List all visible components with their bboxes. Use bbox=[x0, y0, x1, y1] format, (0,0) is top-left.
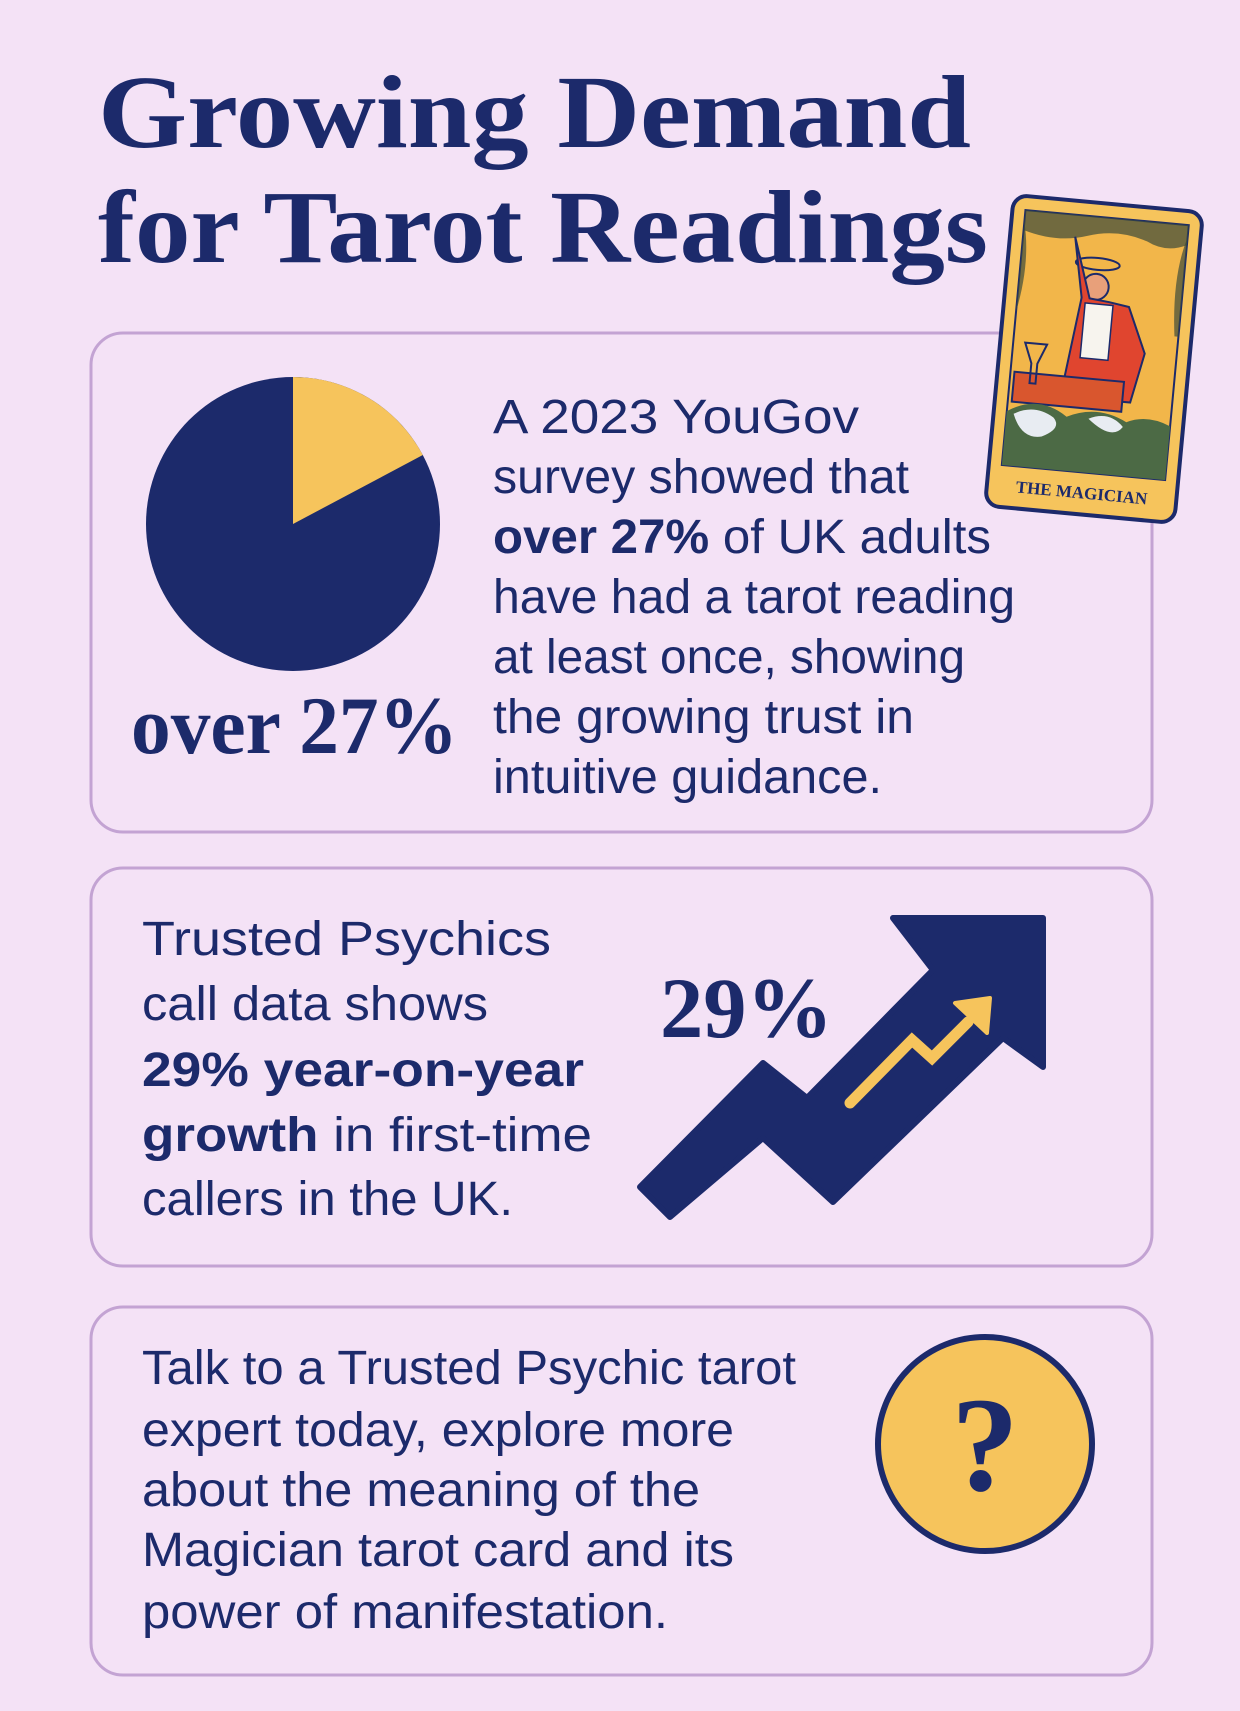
text block: survey description: A 2023 YouGov bbox=[493, 391, 859, 444]
panel: YouGov survey bbox=[91, 333, 1152, 832]
text block: CTA: about the meaning of the bbox=[142, 1464, 700, 1517]
icon: question mark bbox=[878, 1337, 1092, 1551]
title bbox=[98, 55, 988, 285]
text block: growth description: callers in the UK. bbox=[142, 1173, 513, 1226]
text block: CTA: power of manifestation. bbox=[142, 1586, 668, 1639]
text block: survey description: have had a tarot reading bbox=[493, 571, 1015, 624]
text block: survey description: over 27% of UK adults bbox=[493, 511, 991, 564]
title: Growing Demand bbox=[98, 55, 971, 170]
text block: CTA: expert today, explore more bbox=[142, 1404, 734, 1457]
text block: CTA: Magician tarot card and its bbox=[142, 1524, 734, 1577]
text block: CTA bbox=[142, 1342, 796, 1639]
title: for Tarot Readings bbox=[98, 170, 988, 285]
text block: growth description: growth in first-time bbox=[142, 1109, 592, 1162]
text block: survey description: the growing trust in bbox=[493, 691, 914, 744]
text block: growth description: Trusted Psychics bbox=[142, 913, 551, 966]
panel: call to action bbox=[91, 1307, 1152, 1675]
text block: survey description: survey showed that bbox=[493, 451, 909, 504]
pie chart bbox=[146, 377, 440, 671]
text block: growth description: 29% year-on-year bbox=[142, 1044, 584, 1097]
icon: Magician tarot card bbox=[985, 195, 1203, 523]
icon: Magician tarot card: THE MAGICIAN bbox=[1015, 477, 1149, 509]
icon: rising arrow bbox=[640, 918, 1043, 1217]
panel: call data growth bbox=[91, 868, 1152, 1266]
text block: growth description: call data shows bbox=[142, 978, 488, 1031]
text block: survey description: intuitive guidance. bbox=[493, 751, 882, 804]
text block: growth description bbox=[142, 913, 592, 1226]
text block: survey description bbox=[493, 391, 1015, 804]
text block: survey description: at least once, showing bbox=[493, 631, 965, 684]
icon: question mark: ? bbox=[951, 1371, 1019, 1520]
text block: CTA: Talk to a Trusted Psychic tarot bbox=[142, 1342, 796, 1395]
stat: over 27%: over 27% bbox=[131, 680, 458, 771]
stat: 29%: 29% bbox=[660, 960, 833, 1056]
